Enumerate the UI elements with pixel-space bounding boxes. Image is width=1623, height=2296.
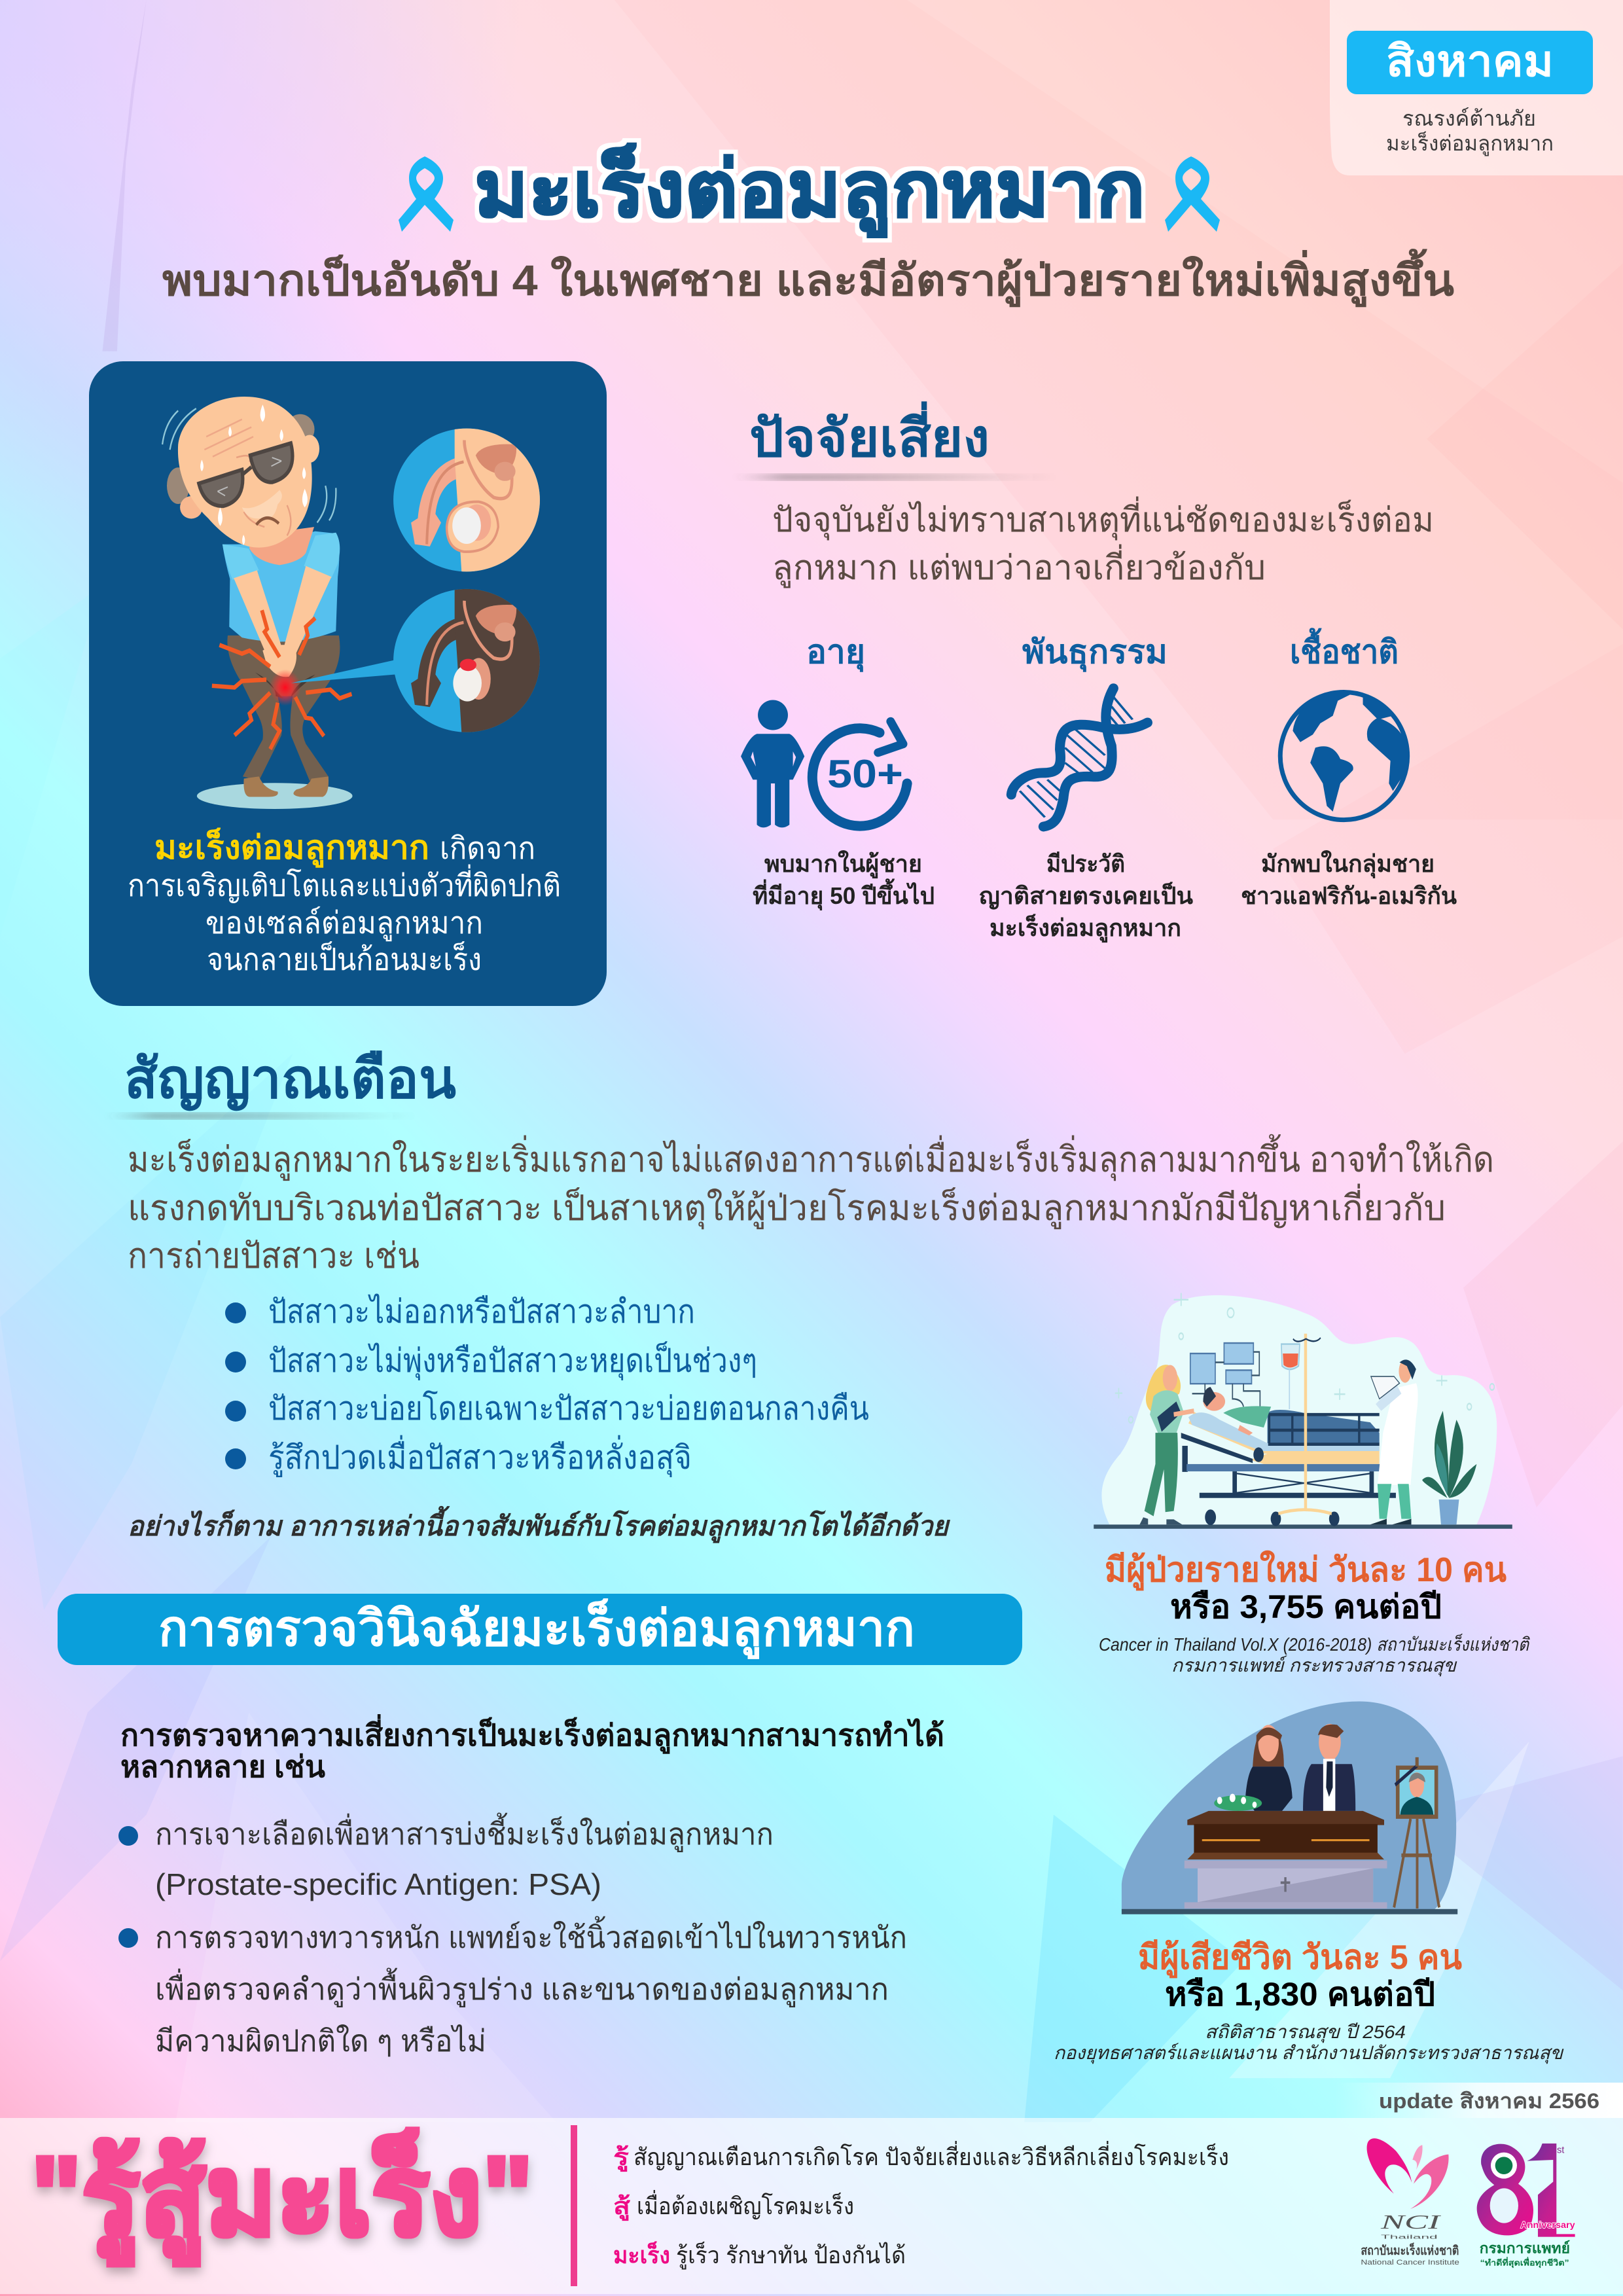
monitors <box>1190 1343 1253 1384</box>
new cases text: Cancer in Thailand Vol.X (2016-2018) สถาบันมะเร็งแห่งชาติ <box>1099 1634 1531 1655</box>
slogan lines: รู้ <box>613 2144 630 2172</box>
logo: National Cancer Institute: NCI <box>1380 2211 1442 2233</box>
logo: 81st anniversary: กรมการแพทย์ <box>1480 2240 1570 2257</box>
slogan lines: สัญญาณเตือนการเกิดโรค ปัจจัยเสี่ยงและวิธีหลีกเลี่ยงโรคมะเร็ง <box>633 2141 1229 2170</box>
logo: 81st anniversary: Anniversary <box>1520 2219 1575 2230</box>
inset: normal anatomy <box>392 423 543 575</box>
diagnosis banner: การตรวจวินิจฉัยมะเร็งต่อมลูกหมาก <box>158 1598 915 1659</box>
intro paragraph <box>772 496 1434 588</box>
new cases text: กรมการแพทย์ กระทรวงสาธารณสุข <box>1171 1655 1457 1677</box>
patient <box>1203 1387 1271 1435</box>
slogan lines: รู้เร็ว รักษาทัน ป้องกันได้ <box>676 2240 906 2270</box>
intro paragraph: ลูกหมาก แต่พบว่าอาจเกี่ยวข้องกับ <box>772 544 1266 588</box>
column: age: ที่มีอายุ 50 ปีขึ้นไป <box>753 878 935 911</box>
logo: National Cancer Institute <box>1361 2138 1459 2267</box>
deaths text <box>1054 1939 1564 2064</box>
column: age: อายุ <box>806 634 865 672</box>
column: ethnicity: เชื้อชาติ <box>1290 628 1399 670</box>
panel text: ของเซลล์ต่อมลูกหมาก <box>205 905 483 942</box>
illustration: old man in pain <box>162 397 543 809</box>
diagnosis intro: การตรวจหาความเสี่ยงการเป็นมะเร็งต่อมลูกหมากสามารถทำได้ <box>120 1714 944 1754</box>
subtitle: พบมากเป็นอันดับ 4 ในเพศชาย และมีอัตราผู้ป่วยรายใหม่เพิ่มสูงขึ้น <box>162 248 1454 308</box>
column: age <box>741 634 935 911</box>
icon: right awareness ribbon <box>1165 156 1220 232</box>
diagnosis list: (Prostate-specific Antigen: PSA) <box>155 1867 601 1901</box>
campaign caption: มะเร็งต่อมลูกหมาก <box>1386 131 1554 156</box>
column: genetics: มีประวัติ <box>1046 850 1125 877</box>
section: diagnosis <box>58 1594 1022 2058</box>
logo: 81st anniversary <box>1477 2144 1575 2269</box>
iv pole <box>1281 1334 1321 1511</box>
slogan lines: เมื่อต้องเผชิญโรคมะเร็ง <box>637 2190 854 2219</box>
warning paragraph: การถ่ายปัสสาวะ เช่น <box>128 1236 419 1276</box>
portrait on easel <box>1394 1757 1439 1909</box>
new cases text: หรือ 3,755 คนต่อปี <box>1170 1588 1442 1625</box>
panel text <box>128 827 561 977</box>
heading: warning signs: สัญญาณเตือน <box>124 1048 456 1112</box>
diagnosis list <box>118 1812 907 2058</box>
symptom list: รู้สึกปวดเมื่อปัสสาวะหรือหลั่งอสุจิ <box>268 1435 692 1477</box>
month badge <box>1347 31 1593 94</box>
warning paragraph <box>128 1134 1494 1276</box>
icon: left awareness ribbon <box>399 156 454 232</box>
icon: DNA helix <box>1011 689 1147 827</box>
column: ethnicity: มักพบในกลุ่มชาย <box>1261 850 1435 879</box>
section: warning signs <box>105 1048 1494 1543</box>
main title: มะเร็งต่อมลูกหมาก <box>474 143 1145 238</box>
column: age: พบมากในผู้ชาย <box>764 850 922 879</box>
footer band <box>0 2118 1623 2294</box>
campaign caption <box>1386 107 1554 156</box>
doctor <box>1370 1359 1418 1524</box>
bed <box>1181 1433 1380 1464</box>
diagnosis list: การตรวจทางทวารหนัก แพทย์จะใช้นิ้วสอดเข้าไปในทวารหนัก <box>155 1916 907 1954</box>
pointer to inset <box>291 660 395 683</box>
deaths text: สถิติสาธารณสุข ปี 2564 <box>1205 2022 1406 2043</box>
panel text: มะเร็งต่อมลูกหมาก <box>154 827 429 868</box>
logo: National Cancer Institute: สถาบันมะเร็งแห่งชาติ <box>1361 2242 1459 2258</box>
heading: risk factors <box>733 401 1060 480</box>
man <box>1303 1724 1355 1811</box>
symptom list: ปัสสาวะบ่อยโดยเฉพาะปัสสาวะบ่อยตอนกลางคืน <box>268 1390 869 1427</box>
diagnosis intro <box>120 1714 944 1784</box>
diagnosis intro: หลากหลาย เช่น <box>120 1749 326 1784</box>
deaths text: มีผู้เสียชีวิต วันละ 5 คน <box>1138 1939 1462 1979</box>
panel text: การเจริญเติบโตและแบ่งตัวที่ผิดปกติ <box>128 864 561 903</box>
coffin <box>1185 1811 1387 1909</box>
deaths text: กองยุทธศาสตร์และแผนงาน สำนักงานปลัดกระทรวงสาธารณสุข <box>1054 2043 1564 2064</box>
symptom list: ปัสสาวะไม่พุ่งหรือปัสสาวะหยุดเป็นช่วงๆ <box>268 1341 757 1380</box>
plant <box>1422 1411 1476 1524</box>
campaign month tab <box>1330 0 1623 175</box>
logo: 81st anniversary: st <box>1557 2145 1564 2155</box>
diagnosis list: มีความผิดปกติใด ๆ หรือไม่ <box>155 2024 486 2058</box>
campaign caption: รณรงค์ต้านภัย <box>1402 107 1536 130</box>
stat: new cases <box>1094 1293 1531 1677</box>
column: ethnicity: ชาวแอฟริกัน-อเมริกัน <box>1241 882 1457 909</box>
column: age: 50+ <box>827 752 903 796</box>
column: ethnicity <box>1241 628 1457 909</box>
diagnosis list: การเจาะเลือดเพื่อหาสารบ่งชี้มะเร็งในต่อมลูกหมาก <box>155 1812 774 1852</box>
symptom list: ปัสสาวะไม่ออกหรือปัสสาวะลำบาก <box>268 1293 695 1330</box>
intro paragraph: ปัจจุบันยังไม่ทราบสาเหตุที่แน่ชัดของมะเร็งต่อม <box>772 496 1434 541</box>
italic note: อย่างไรก็ตาม อาการเหล่านี้อาจสัมพันธ์กับโรคต่อมลูกหมากโตได้อีกด้วย <box>128 1505 950 1543</box>
column: genetics: พันธุกรรม <box>1022 634 1168 672</box>
slogan lines <box>613 2141 1229 2270</box>
new cases text <box>1099 1550 1531 1677</box>
warning paragraph: แรงกดทับบริเวณท่อปัสสาวะ เป็นสาเหตุให้ผู้ป่วยโรคมะเร็งต่อมลูกหมากมักมีปัญหาเกี่ยวกับ <box>128 1183 1446 1230</box>
panel text: เกิดจาก <box>440 831 535 865</box>
diagnosis banner <box>58 1594 1022 1665</box>
section: risk factors <box>733 401 1457 943</box>
new cases text: มีผู้ป่วยรายใหม่ วันละ 10 คน <box>1105 1550 1507 1591</box>
heading: risk factors: ปัจจัยเสี่ยง <box>749 401 990 467</box>
woman <box>1245 1725 1293 1811</box>
update stamp: update สิงหาคม 2566 <box>1379 2089 1599 2113</box>
flowers <box>1214 1794 1262 1811</box>
slogan lines: มะเร็ง <box>613 2240 670 2269</box>
column: genetics <box>979 634 1193 943</box>
logo: National Cancer Institute: National Cancer Institute <box>1361 2259 1459 2267</box>
illustration: hospital bed scene <box>1094 1293 1512 1529</box>
title block <box>162 143 1454 308</box>
campaign slogan: "รู้สู้มะเร็ง" <box>31 2128 533 2266</box>
deaths text: หรือ 1,830 คนต่อปี <box>1165 1976 1435 2013</box>
warning paragraph: มะเร็งต่อมลูกหมากในระยะเริ่มแรกอาจไม่แสดงอาการแต่เมื่อมะเร็งเริ่มลุกลามมากขึ้น อาจทำให้เกิด <box>128 1134 1494 1181</box>
diagnosis list: เพื่อตรวจคลำดูว่าพื้นผิวรูปร่าง และขนาดของต่อมลูกหมาก <box>155 1967 889 2007</box>
column: genetics: มะเร็งต่อมลูกหมาก <box>990 913 1181 943</box>
slogan lines: สู้ <box>613 2193 630 2221</box>
column: genetics: ญาติสายตรงเคยเป็น <box>979 881 1193 910</box>
panel: what is prostate cancer <box>89 361 607 1006</box>
month badge: สิงหาคม <box>1386 37 1554 85</box>
inset: tumour anatomy <box>392 583 543 735</box>
logo: National Cancer Institute: Thailand <box>1381 2234 1438 2240</box>
symptom list <box>225 1293 869 1477</box>
illustration: funeral scene <box>1122 1702 1457 1914</box>
icon: person with 50+ <box>741 700 907 827</box>
update stamp <box>1335 2083 1623 2118</box>
icon: globe <box>1280 692 1408 820</box>
stat: deaths <box>1054 1702 1564 2064</box>
logo: 81st anniversary: “ทำดีที่สุดเพื่อทุกชีวิต” <box>1480 2257 1569 2269</box>
panel text: จนกลายเป็นก้อนมะเร็ง <box>207 941 482 977</box>
nurse <box>1139 1365 1194 1524</box>
